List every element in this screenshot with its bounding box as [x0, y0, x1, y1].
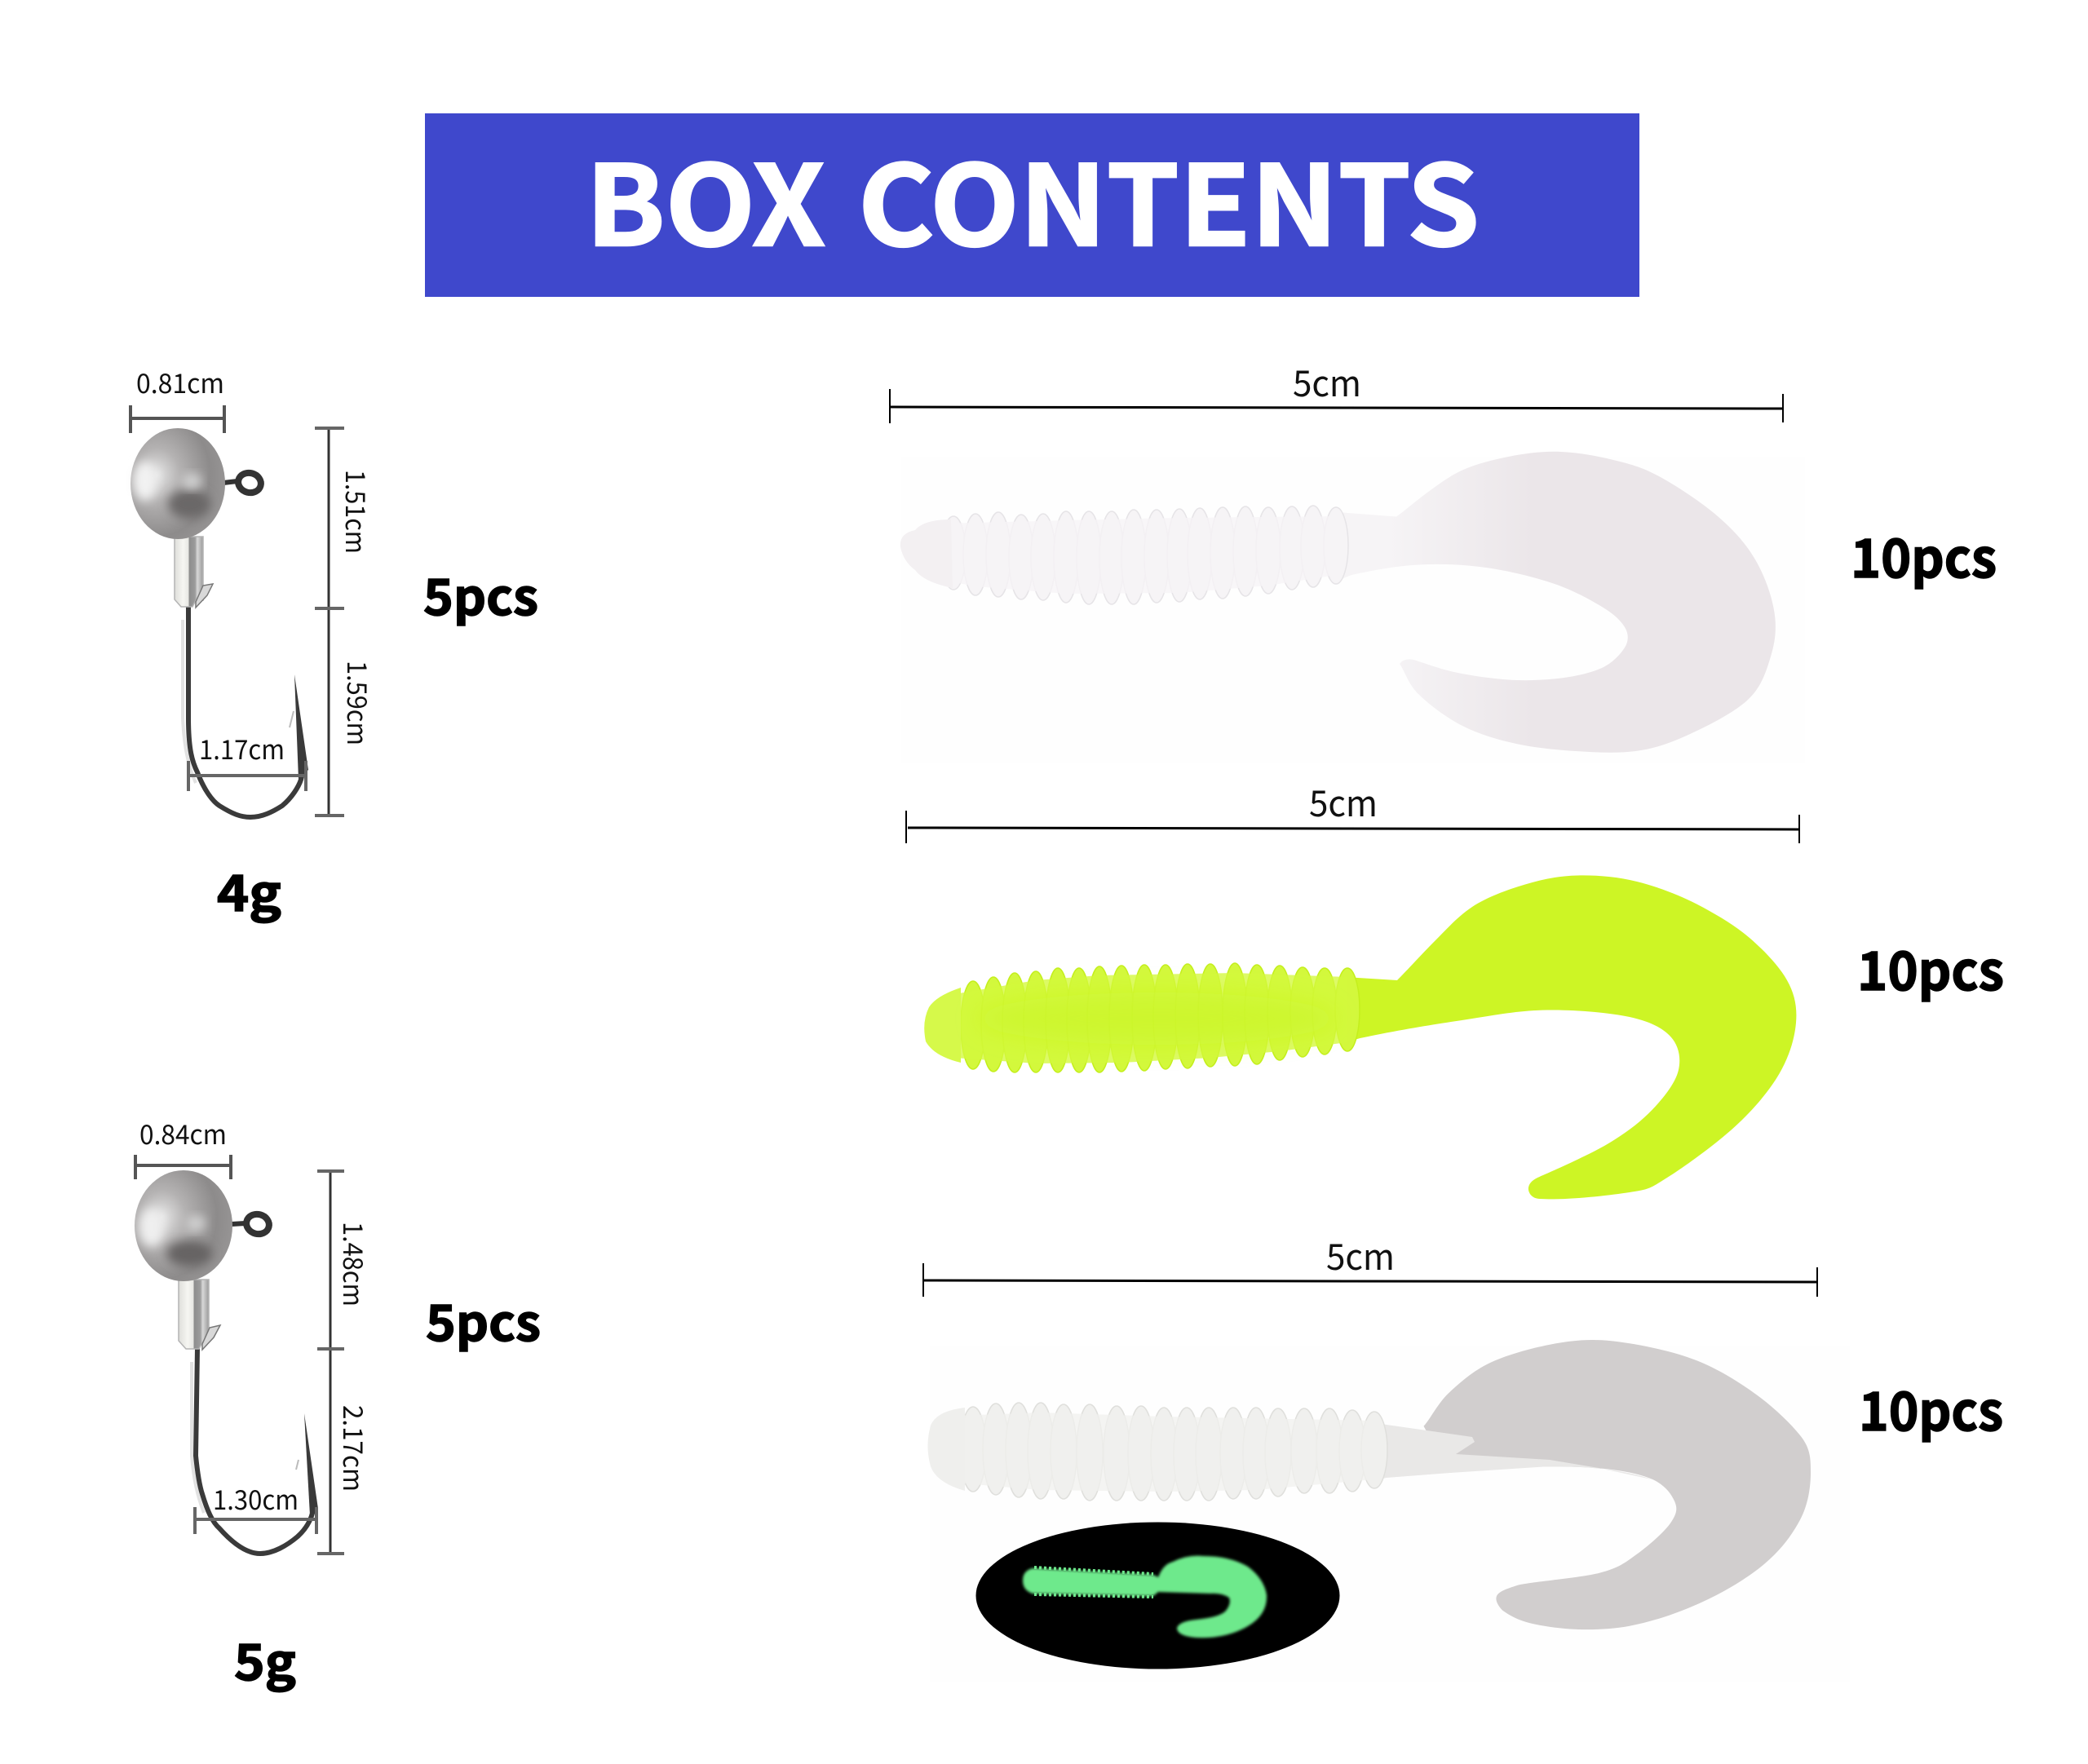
- quantity 5pcs: 5pcs: [426, 1283, 541, 1355]
- neck: [1370, 1422, 1652, 1481]
- glowing grub: [1023, 1556, 1267, 1638]
- title text: CONTENTS: [858, 117, 1480, 278]
- lure 1: white grub: [890, 355, 1997, 763]
- jig head 5g panel: [135, 1113, 541, 1554]
- title text: [586, 117, 1480, 278]
- quantity 10pcs: 10pcs: [1857, 929, 2004, 1006]
- dimension: gap 1.30cm: [195, 1479, 316, 1534]
- dimension: vertical heights: 1.51cm: [338, 470, 377, 554]
- dimension: vertical heights: 1.59cm: [339, 661, 378, 745]
- quantity 10pcs: 10pcs: [1851, 516, 1997, 593]
- dimension 5cm: 5cm: [1293, 355, 1361, 407]
- dimension 5cm: 5cm: [1309, 775, 1378, 827]
- dimension: vertical heights: [317, 1171, 374, 1554]
- dimension: vertical heights: 1.48cm: [335, 1222, 374, 1306]
- inset: glow in the dark ellipse: [975, 1522, 1339, 1669]
- lure image: [924, 875, 1796, 1199]
- jig head 4g panel: [130, 362, 538, 817]
- quantity 10pcs: 10pcs: [1859, 1369, 2003, 1446]
- lure 2: chartreuse grub: [906, 775, 2004, 1199]
- icon: jig head 5g: [135, 1170, 318, 1554]
- dimension 5cm: [906, 775, 1799, 843]
- title banner: [425, 113, 1639, 297]
- icon: jig head 4g: [130, 428, 308, 817]
- lure image: [928, 1340, 1850, 1682]
- dimension: gap 1.30cm: 1.30cm: [213, 1479, 299, 1518]
- weight label 5g: 5g: [234, 1622, 296, 1695]
- dimension: head width 0.84cm: [135, 1113, 231, 1179]
- dimension 5cm: [890, 355, 1783, 423]
- lure image: [900, 452, 1805, 763]
- dimension: vertical heights: 2.17cm: [335, 1405, 374, 1492]
- dimension: gap 1.17cm: 1.17cm: [199, 728, 285, 767]
- lure 3: glow grub: [923, 1228, 2003, 1682]
- dimension 5cm: 5cm: [1326, 1228, 1395, 1280]
- dimension 5cm: [923, 1228, 1817, 1297]
- dimension: vertical heights: [315, 428, 378, 816]
- quantity 5pcs: 5pcs: [423, 557, 538, 630]
- dimension: gap 1.17cm: [188, 728, 306, 791]
- title text: BOX: [586, 117, 825, 278]
- dimension: head width 0.84cm: 0.84cm: [139, 1113, 227, 1152]
- dimension: head width 0.81cm: 0.81cm: [136, 362, 224, 401]
- weight label 4g: 4g: [217, 853, 281, 926]
- dimension: head width 0.81cm: [130, 362, 224, 433]
